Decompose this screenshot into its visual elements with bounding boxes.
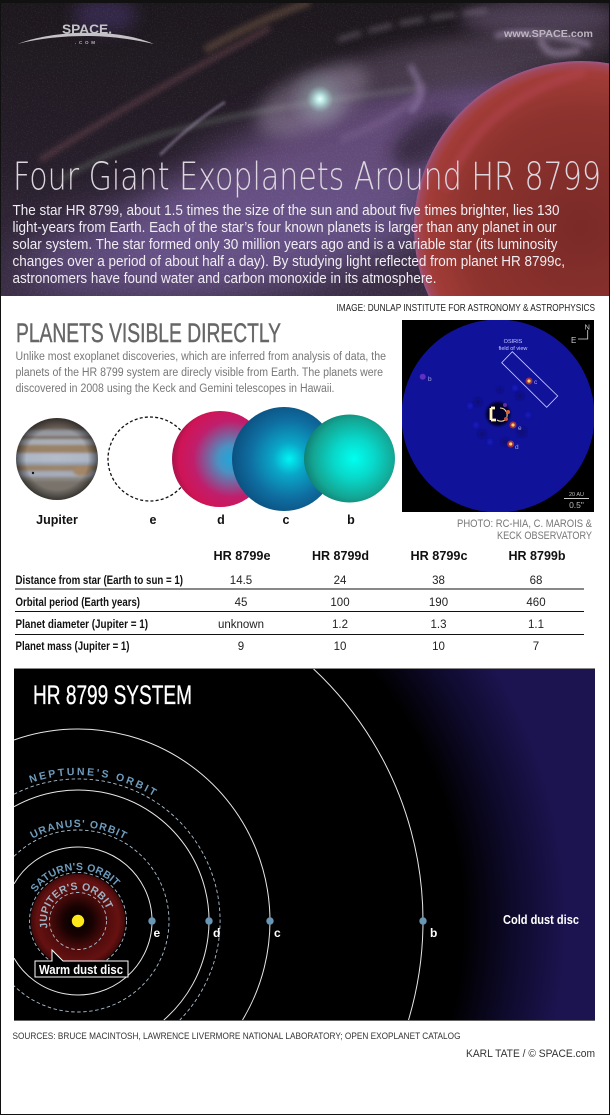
telescope image of HR 8799: b xyxy=(428,376,432,383)
orbit planet letters: d xyxy=(213,926,220,940)
orbit planet letters: c xyxy=(274,926,281,940)
photo credit: PHOTO: RC-HIA, C. MAROIS & xyxy=(457,518,593,530)
icon: planet e outline xyxy=(108,417,192,501)
table row labels xyxy=(16,575,183,653)
callout: warm dust disc xyxy=(35,950,128,977)
telescope image of HR 8799: 0.5" xyxy=(569,500,584,510)
panel: header space artwork xyxy=(0,0,610,322)
table row labels: Orbital period (Earth years) xyxy=(16,597,140,609)
icon: planet c xyxy=(232,407,336,511)
table values: 1.3 xyxy=(430,619,446,631)
heading: planets visible directly: PLANETS VISIBLE DIRECTLY xyxy=(16,318,281,348)
orbit planet letters: b xyxy=(430,926,437,940)
orbit labels xyxy=(29,768,158,928)
orbit labels: SATURN'S ORBIT xyxy=(31,862,121,892)
table values: 10 xyxy=(334,641,346,653)
telescope image of HR 8799: N xyxy=(584,322,590,332)
paragraph: direct visibility xyxy=(16,351,386,395)
table row labels: Planet mass (Jupiter = 1) xyxy=(16,641,130,653)
website url: www.SPACE.com xyxy=(503,28,593,40)
table values: 1.1 xyxy=(528,619,544,631)
orbit planet letters xyxy=(154,926,437,940)
planet labels xyxy=(36,513,355,527)
planet xyxy=(414,61,610,296)
label: cold dust disc: Cold dust disc xyxy=(503,913,579,927)
table values: 100 xyxy=(330,597,350,609)
star xyxy=(72,915,84,927)
orbit labels: NEPTUNE'S ORBIT xyxy=(29,768,158,795)
table values: 45 xyxy=(235,597,247,609)
byline: KARL TATE / © SPACE.com xyxy=(466,1048,595,1060)
table values: 460 xyxy=(526,597,546,609)
telescope image of HR 8799: field of view xyxy=(499,346,527,352)
telescope image of HR 8799 xyxy=(402,320,594,512)
photo credit xyxy=(457,518,593,542)
intro text xyxy=(12,203,565,287)
table row labels: Distance from star (Earth to sun = 1) xyxy=(16,575,183,587)
table values: 14.5 xyxy=(230,575,252,587)
telescope image of HR 8799: d xyxy=(515,444,519,451)
paragraph: direct visibility: discovered in 2008 using the Keck and Gemini telescopes in Hawaii. xyxy=(16,383,334,395)
telescope image of HR 8799: E xyxy=(571,336,576,345)
icon: planet b xyxy=(304,414,395,502)
photo credit: KECK OBSERVATORY xyxy=(497,530,593,542)
logo: SPACE.com: .COM xyxy=(75,40,95,45)
telescope image of HR 8799: OSIRIS xyxy=(504,339,523,345)
table values: unknown xyxy=(218,619,264,631)
table values: 68 xyxy=(530,575,542,587)
table values: 10 xyxy=(432,641,445,653)
warm dust disc xyxy=(30,873,126,969)
planet labels: d xyxy=(217,513,225,527)
icon: planet d xyxy=(172,411,268,507)
table values: 24 xyxy=(334,575,347,587)
intro text: solar system. The star formed only 30 million years ago and is a variable star (its luminosity xyxy=(12,237,558,253)
planet orbits xyxy=(14,669,423,1020)
planet labels: c xyxy=(283,513,290,527)
logo: SPACE.com xyxy=(18,22,154,45)
orbit labels: URANUS' ORBIT xyxy=(30,820,128,838)
callout: warm dust disc: Warm dust disc xyxy=(39,963,123,977)
telescope image of HR 8799: c xyxy=(534,379,538,386)
table: planet data xyxy=(15,549,584,653)
orbit labels: JUPITER'S ORBIT xyxy=(40,882,114,928)
intro text: The star HR 8799, about 1.5 times the size of the sun and about five times brighter, lies 130 xyxy=(12,203,560,219)
planet labels: e xyxy=(150,513,157,527)
intro text: astronomers have found water and carbon monoxide in its atmosphere. xyxy=(12,271,436,287)
telescope image of HR 8799: 20 AU xyxy=(569,492,584,498)
table header: HR 8799b xyxy=(508,549,566,563)
table header: HR 8799c xyxy=(410,549,468,563)
planet labels: b xyxy=(347,513,355,527)
table values: 38 xyxy=(432,575,445,587)
table values xyxy=(218,575,546,653)
panel: HR 8799 system diagram xyxy=(14,668,595,1021)
paragraph: direct visibility: planets of the HR 8799 system are direcly visible from Earth. The planets were xyxy=(16,367,383,379)
paragraph: direct visibility: Unlike most exoplanet discoveries, which are inferred from analysis of data, the xyxy=(16,351,386,363)
sources: SOURCES: BRUCE MACINTOSH, LAWRENCE LIVERMORE NATIONAL LABORATORY; OPEN EXOPLANET CATALOG xyxy=(12,1031,460,1042)
diagram title: HR 8799 SYSTEM xyxy=(33,680,192,710)
logo: SPACE.com: SPACE. xyxy=(62,22,112,36)
solar system orbits xyxy=(14,779,220,1020)
planet labels: Jupiter xyxy=(36,513,78,527)
table values: 7 xyxy=(533,641,539,653)
table header xyxy=(214,549,566,563)
planet markers xyxy=(148,917,427,925)
intro text: light-years from Earth. Each of the star’s four known planets is larger than any planet in our xyxy=(12,220,557,236)
icon: Jupiter xyxy=(14,416,100,501)
telescope image of HR 8799: e xyxy=(518,425,522,432)
table header: HR 8799d xyxy=(312,549,369,563)
table values: 190 xyxy=(429,597,448,609)
table values: 1.2 xyxy=(332,619,348,631)
intro text: changes over a period of about half a day). By studying light reflected from planet HR 8799c, xyxy=(12,254,565,270)
table values: 9 xyxy=(238,641,244,653)
table header: HR 8799e xyxy=(214,549,271,563)
table row labels: Planet diameter (Jupiter = 1) xyxy=(16,619,148,631)
orbit planet letters: e xyxy=(154,926,160,940)
